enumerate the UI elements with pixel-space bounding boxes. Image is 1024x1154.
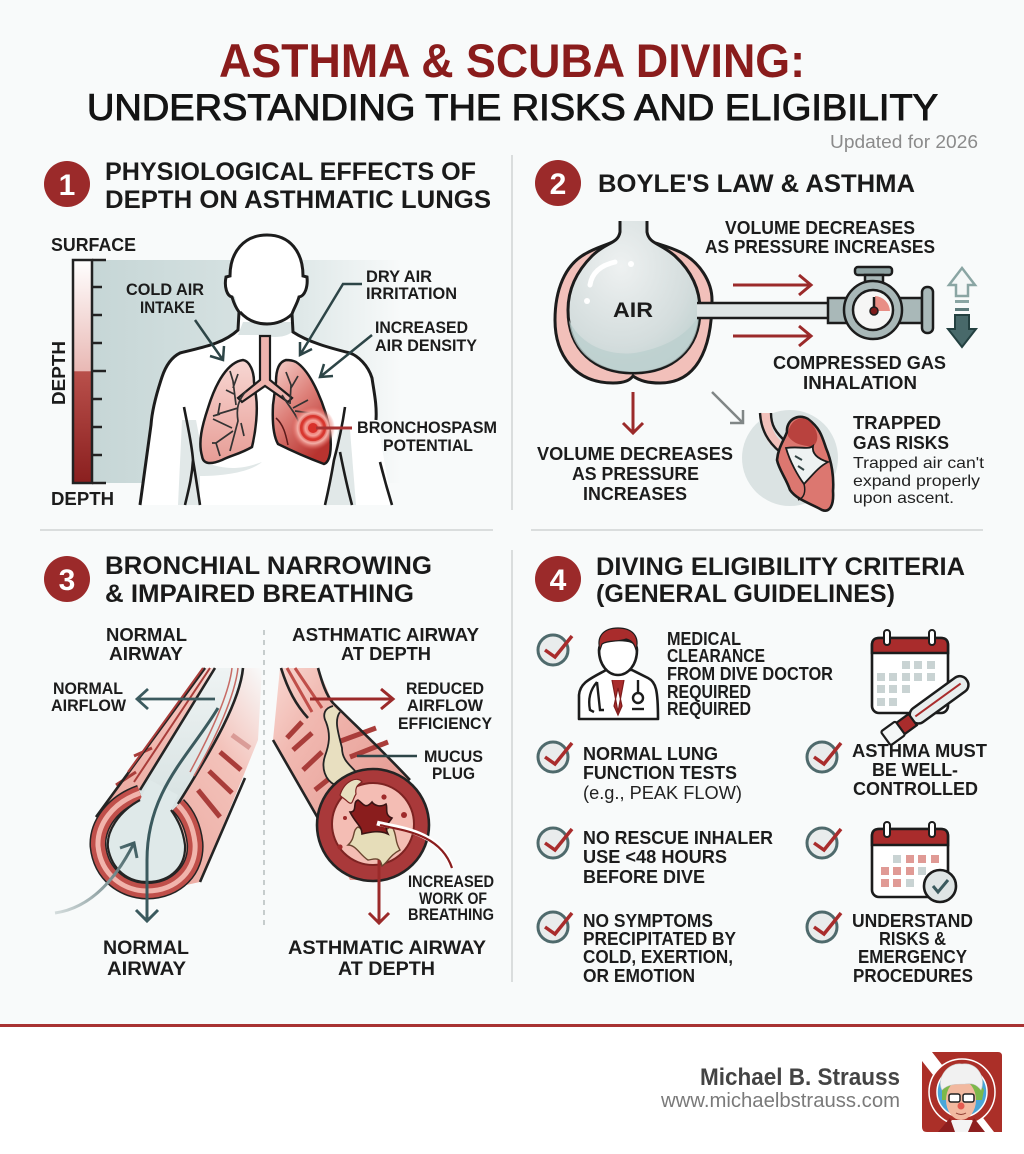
- heading: normal airway: AIRWAY: [109, 644, 183, 664]
- heading: section 2: [535, 160, 915, 206]
- label: increased air density: [320, 319, 477, 377]
- heading: section 3: 3: [59, 564, 75, 597]
- author logo: [922, 1052, 1002, 1132]
- author credit: Michael B. Strauss: [700, 1064, 900, 1091]
- arrow: volume decreases down: [623, 392, 643, 433]
- title: [87, 34, 938, 128]
- heading: section 4: (GENERAL GUIDELINES): [596, 580, 895, 608]
- text: asthma well-controlled: ASTHMA MUST: [852, 741, 987, 761]
- heading: asthmatic airway: [292, 625, 479, 664]
- text: understand risks: UNDERSTAND: [852, 911, 973, 931]
- label: dry air irritation: DRY AIR: [366, 268, 432, 286]
- text: understand risks: PROCEDURES: [853, 966, 973, 986]
- update note: Updated for 2026: [830, 132, 978, 152]
- label: increased work of breathing: BREATHING: [408, 906, 494, 924]
- airflow arrow: down through airway: [136, 708, 218, 921]
- depth up/down arrows: [948, 268, 976, 347]
- label: increased work of breathing: WORK OF: [419, 890, 487, 908]
- doctor icon: [579, 628, 658, 719]
- label: volume decreases lower: AS PRESSURE: [572, 464, 699, 484]
- heading: normal airway: [106, 625, 187, 664]
- title: UNDERSTANDING THE RISKS AND ELIGIBILITY: [87, 87, 938, 128]
- label: compressed gas inhalation: [773, 353, 946, 393]
- heading: section 1: DEPTH ON ASTHMATIC LUNGS: [105, 186, 491, 214]
- heading: section 1: 1: [59, 169, 75, 202]
- label: increased air density: AIR DENSITY: [375, 337, 477, 355]
- heading: asthmatic airway: AT DEPTH: [341, 644, 431, 664]
- label: reduced airflow efficiency: [398, 680, 492, 733]
- text: no rescue inhaler: [583, 828, 773, 887]
- label: volume decreases top: [705, 218, 935, 257]
- text: no symptoms: COLD, EXERTION,: [583, 947, 733, 967]
- title: ASTHMA & SCUBA DIVING:: [219, 34, 805, 87]
- text: asthma well-controlled: [852, 741, 987, 799]
- heading: section 2: BOYLE'S LAW & ASTHMA: [598, 170, 915, 198]
- label: normal airflow: NORMAL: [53, 680, 123, 698]
- label: volume decreases lower: VOLUME DECREASES: [537, 444, 733, 464]
- heading: asthmatic airway: ASTHMATIC AIRWAY: [292, 625, 479, 645]
- text: trapped gas risks: [853, 413, 985, 507]
- label: cold air intake: [126, 281, 224, 360]
- text: asthma well-controlled: CONTROLLED: [853, 779, 978, 799]
- text: medical clearance: REQUIRED: [667, 699, 751, 719]
- text: normal lung function: (e.g., PEAK FLOW): [583, 783, 742, 803]
- label: volume decreases lower: [537, 444, 733, 504]
- calendar and inhaler icon: [872, 630, 972, 745]
- label: bronchospasm potential: [357, 419, 497, 455]
- calendar with check icon: [872, 822, 956, 902]
- heading: section 3: [44, 552, 432, 608]
- author credit: www.michaelbstrauss.com: [660, 1090, 900, 1112]
- text: understand risks: RISKS &: [879, 929, 946, 949]
- panel: diving eligibility criteria: [535, 553, 987, 986]
- flask lung with air: [555, 221, 712, 383]
- label: bronchospasm potential: POTENTIAL: [383, 437, 473, 455]
- label: asthmatic airway bottom: [288, 938, 486, 980]
- label: reduced airflow efficiency: AIRFLOW: [407, 697, 483, 715]
- label: increased air density: INCREASED: [375, 319, 468, 337]
- leader curve: increased work of breathing: [377, 823, 452, 868]
- text: normal lung function: FUNCTION TESTS: [583, 763, 737, 783]
- label: compressed gas inhalation: INHALATION: [803, 373, 917, 393]
- text: no rescue inhaler: BEFORE DIVE: [583, 867, 705, 887]
- author credit: [660, 1064, 900, 1112]
- text: understand risks: EMERGENCY: [858, 947, 967, 967]
- heading: section 1: [44, 158, 491, 214]
- heading: section 4: DIVING ELIGIBILITY CRITERIA: [596, 553, 965, 581]
- label: volume decreases top: AS PRESSURE INCREASES: [705, 237, 935, 257]
- label: volume decreases top: VOLUME DECREASES: [725, 218, 915, 238]
- text: no rescue inhaler: USE <48 HOURS: [583, 847, 727, 867]
- label: normal airflow: [51, 680, 126, 715]
- text: medical clearance: [667, 629, 833, 719]
- label: asthmatic airway bottom: AT DEPTH: [338, 959, 435, 980]
- teal water backdrop: [92, 260, 402, 483]
- label: normal airflow: AIRFLOW: [51, 697, 126, 715]
- text: medical clearance: FROM DIVE DOCTOR: [667, 664, 833, 684]
- airflow arrow: normal airflow left: [137, 689, 215, 709]
- text: trapped gas risks: GAS RISKS: [853, 433, 949, 453]
- label: bronchospasm potential: BRONCHOSPASM: [357, 419, 497, 437]
- text: medical clearance: CLEARANCE: [667, 646, 765, 666]
- heading: section 3: BRONCHIAL NARROWING: [105, 552, 432, 580]
- label: increased work of breathing: INCREASED: [408, 873, 494, 891]
- lungs with bronchial tree: [200, 336, 331, 464]
- panel: boyle's law: [535, 160, 985, 511]
- label: cold air intake: COLD AIR: [126, 281, 204, 299]
- checkmark icons: [538, 635, 841, 942]
- text: trapped gas risks: Trapped air can't: [853, 455, 985, 472]
- leader: mucus plug: [357, 755, 417, 757]
- normal airway illustration: [96, 668, 262, 895]
- label: cold air intake: INTAKE: [140, 299, 195, 317]
- footer band: [0, 1024, 1024, 1154]
- label: mucus plug: PLUG: [432, 765, 475, 783]
- trapped gas lung icon: [742, 410, 838, 511]
- text: normal lung function: [583, 744, 742, 803]
- text: normal lung function: NORMAL LUNG: [583, 744, 718, 764]
- bronchospasm hot spot: [291, 406, 352, 450]
- arrow: to trapped gas: [712, 392, 743, 423]
- flask lung with air: AIR: [613, 299, 653, 322]
- arrow: down asthmatic airway: [369, 860, 389, 923]
- text: medical clearance: MEDICAL: [667, 629, 741, 649]
- airflow arrow: inflow curve: [55, 843, 137, 913]
- label: dry air irritation: IRRITATION: [366, 285, 457, 303]
- arrow: reduced airflow: [310, 689, 393, 709]
- text: no rescue inhaler: NO RESCUE INHALER: [583, 828, 773, 848]
- label: dry air irritation: [300, 268, 457, 355]
- depth gauge: SURFACE: [51, 235, 136, 255]
- regulator valve gauge: [697, 267, 933, 339]
- panel: physiological effects of depth: [44, 158, 497, 509]
- text: medical clearance: REQUIRED: [667, 682, 751, 702]
- panel: bronchial narrowing: [44, 552, 494, 980]
- asthmatic airway illustration: [273, 668, 429, 881]
- heading: section 1: PHYSIOLOGICAL EFFECTS OF: [105, 158, 476, 186]
- label: compressed gas inhalation: COMPRESSED GAS: [773, 353, 946, 373]
- depth gauge: DEPTH: [49, 341, 69, 405]
- heading: section 2: 2: [550, 168, 566, 201]
- text: trapped gas risks: upon ascent.: [853, 490, 954, 507]
- text: asthma well-controlled: BE WELL-: [872, 760, 958, 780]
- label: normal airway bottom: NORMAL: [103, 938, 189, 959]
- red arrows to valve: [733, 275, 811, 346]
- label: mucus plug: MUCUS: [424, 748, 483, 766]
- label: normal airway bottom: AIRWAY: [107, 959, 186, 980]
- heading: normal airway: NORMAL: [106, 625, 187, 645]
- dashed divider between airways: [263, 630, 265, 925]
- heading: section 4: [535, 553, 965, 608]
- label: reduced airflow efficiency: EFFICIENCY: [398, 715, 492, 733]
- human torso figure: [140, 235, 392, 505]
- label: normal airway bottom: [103, 938, 189, 980]
- text: trapped gas risks: TRAPPED: [853, 413, 941, 433]
- label: reduced airflow efficiency: REDUCED: [406, 680, 484, 698]
- text: trapped gas risks: expand properly: [853, 473, 980, 490]
- heading: section 3: & IMPAIRED BREATHING: [105, 580, 414, 608]
- depth gauge: [49, 235, 136, 509]
- label: mucus plug: [424, 748, 483, 783]
- heading: section 4: 4: [550, 564, 567, 597]
- text: no symptoms: NO SYMPTOMS: [583, 911, 713, 931]
- label: increased work of breathing: [408, 873, 494, 924]
- text: no symptoms: [583, 911, 736, 986]
- label: asthmatic airway bottom: ASTHMATIC AIRWAY: [288, 938, 486, 959]
- text: understand risks: [852, 911, 973, 986]
- depth gauge: DEPTH: [51, 489, 114, 509]
- text: no symptoms: OR EMOTION: [583, 966, 695, 986]
- label: volume decreases lower: INCREASES: [583, 484, 687, 504]
- text: no symptoms: PRECIPITATED BY: [583, 929, 736, 949]
